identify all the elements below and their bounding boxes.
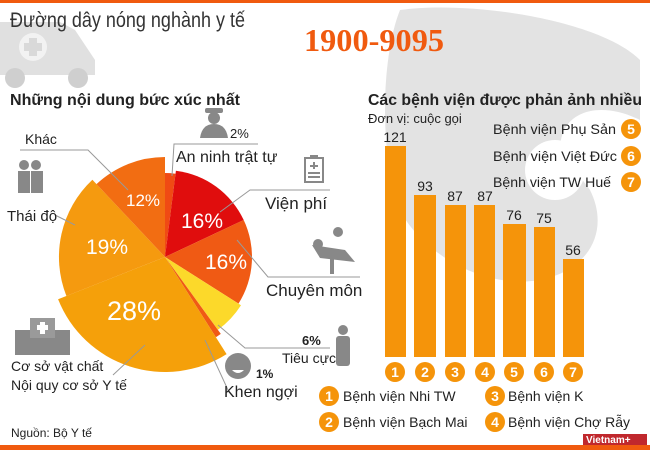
- legend: 5-7: 7: [627, 174, 635, 190]
- pie chart: 16%: [181, 210, 223, 233]
- legend: 1-4: 2: [325, 414, 333, 430]
- label: Chuyen mon: Chuyên môn: [266, 281, 362, 300]
- legend: 5-7: Bệnh viện Phụ Sản: [493, 121, 616, 137]
- bar chart: 5: [510, 364, 518, 380]
- bar chart: 87: [477, 188, 493, 204]
- bar chart: 2: [421, 364, 429, 380]
- label: Thai do: Thái độ: [7, 208, 57, 225]
- bar chart: 87: [447, 188, 463, 204]
- legend: 1-4: Bệnh viện K: [508, 388, 584, 404]
- label: Khen ngoi: [224, 353, 298, 401]
- label: Khen ngoi: 1%: [256, 367, 274, 381]
- label: An ninh trat tu: An ninh trật tự: [176, 149, 278, 166]
- legend: 5-7: [493, 119, 641, 192]
- label: Khac: Khác: [25, 131, 57, 147]
- bar chart: 56: [565, 242, 581, 258]
- logo: Vietnam+: Vietnam+: [586, 435, 631, 446]
- label: Vien phi: Viện phí: [265, 194, 327, 213]
- title: Đường dây nóng nghành y tế: [10, 9, 245, 32]
- label: Tieu cuc: 6%: [302, 333, 321, 348]
- label lines: [20, 144, 360, 390]
- bar chart: 7: [569, 364, 577, 380]
- legend: 5-7: 5: [627, 121, 635, 137]
- source: Nguồn: Bộ Y tế: [11, 426, 92, 440]
- label: Vien phi: [265, 155, 327, 213]
- label: Khen ngoi: Khen ngợi: [224, 384, 298, 401]
- background: phone handset: [385, 7, 640, 282]
- label: Co so vat chat: [11, 318, 127, 393]
- bar chart: 121: [383, 129, 407, 145]
- subtitle: unit: Đơn vị: cuộc gọi: [368, 111, 462, 126]
- pie chart: 16%: [205, 251, 247, 274]
- label: Chuyen mon: [266, 227, 362, 300]
- legend: 1-4: [319, 386, 630, 432]
- bar chart: 6: [540, 364, 548, 380]
- legend: 1-4: 1: [325, 388, 333, 404]
- heading: pie: Những nội dung bức xúc nhất: [10, 92, 241, 109]
- pie chart: 28%: [107, 296, 161, 326]
- label: An ninh trat tu: [176, 108, 278, 166]
- bar chart: 76: [506, 207, 522, 223]
- legend: 1-4: 3: [491, 388, 499, 404]
- bar chart: 4: [481, 364, 489, 380]
- icon: ambulance background: [0, 22, 95, 88]
- pie chart: 19%: [86, 236, 128, 259]
- hotline number: 1900-9095: [304, 22, 444, 58]
- label: Co so vat chat: Nội quy cơ sở Y tế: [11, 377, 127, 393]
- legend: 1-4: Bệnh viện Bạch Mai: [343, 414, 468, 430]
- bar chart: 1: [391, 364, 399, 380]
- heading: bar chart: Các bệnh viện được phản ảnh nhiều: [368, 92, 642, 109]
- legend: 1-4: Bệnh viện Chợ Rẫy: [508, 414, 630, 430]
- label: Tieu cuc: [282, 325, 350, 366]
- label: Tieu cuc: Tiêu cực: [282, 350, 336, 366]
- label: Thai do: [7, 160, 57, 225]
- bar chart: 93: [417, 178, 433, 194]
- legend: 5-7: Bệnh viện Việt Đức: [493, 148, 617, 164]
- bottom bar: [0, 445, 650, 450]
- legend: 1-4: Bệnh viện Nhi TW: [343, 388, 456, 404]
- pie chart: [58, 157, 252, 372]
- legend: 5-7: 6: [627, 148, 635, 164]
- bar chart: [383, 129, 584, 382]
- legend: 1-4: 4: [491, 414, 499, 430]
- top bar: [0, 0, 650, 3]
- pie chart: 12%: [126, 191, 160, 210]
- bar chart: 75: [536, 210, 552, 226]
- logo: Vietnam+: [583, 434, 647, 446]
- legend: 5-7: Bệnh viện TW Huế: [493, 174, 611, 190]
- label: Co so vat chat: Cơ sở vật chất: [11, 358, 103, 374]
- label: An ninh trat tu: 2%: [230, 126, 249, 141]
- bar chart: 3: [451, 364, 459, 380]
